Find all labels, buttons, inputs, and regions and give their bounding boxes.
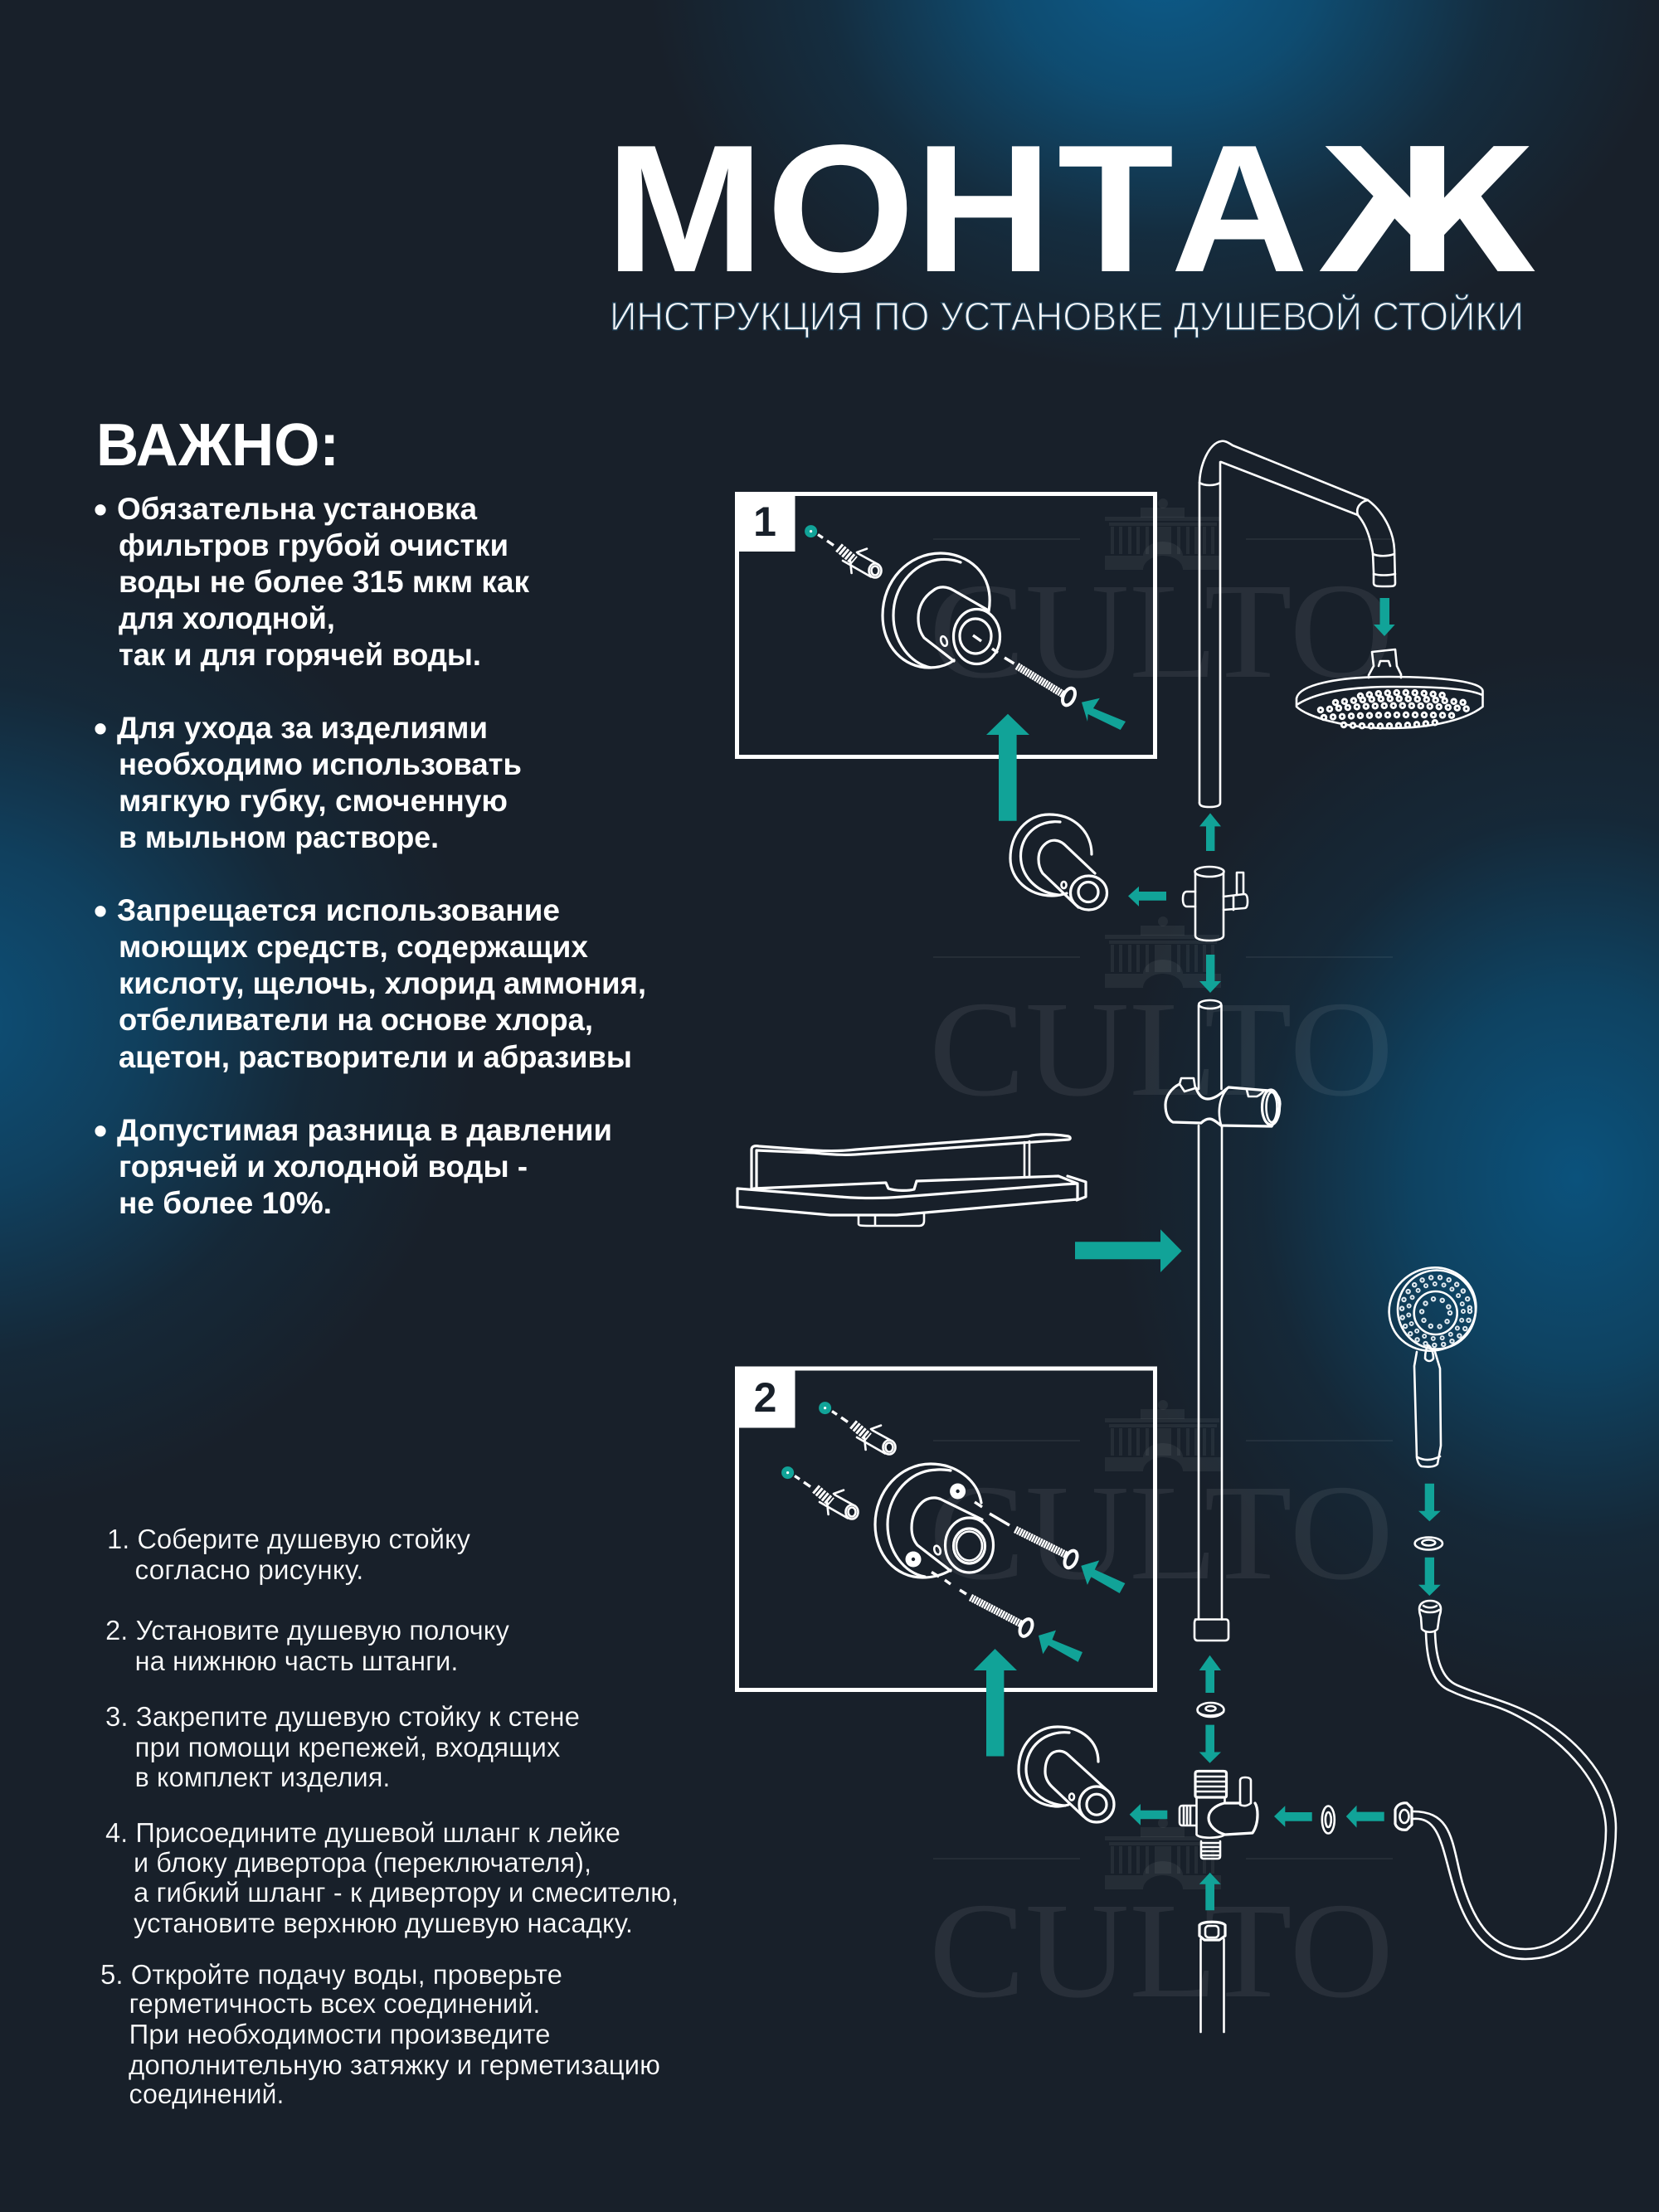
icon: wall plug (805, 525, 881, 577)
arrow: hand shower to gasket (1418, 1484, 1441, 1521)
bullet 2: необходимо использовать (119, 747, 522, 781)
bullet list: important notes (94, 488, 646, 1220)
icon: top connector with lever (1183, 867, 1248, 941)
step 4: и блоку дивертора (переключателя), (134, 1847, 591, 1878)
arrow: gasket to diverter (1199, 1725, 1221, 1763)
step 5: соединений. (129, 2078, 284, 2109)
bullet 3: моющих средств, содержащих (119, 930, 588, 964)
step 1 (107, 1524, 470, 1585)
step 2: на нижнюю часть штанги. (134, 1646, 458, 1676)
arrow: connector to rail (1199, 955, 1221, 993)
icon: small wall bracket lower (1019, 1727, 1114, 1822)
watermark: culto second: CULTO (929, 973, 1394, 1125)
step 4: установите верхнюю душевую насадку. (134, 1908, 633, 1938)
arrow: bracket to detail 2 (974, 1649, 1017, 1757)
bullet 3 (94, 889, 646, 1074)
number tile 1: 1 (753, 498, 776, 545)
icon: hand shower (1375, 1253, 1490, 1467)
step 5: дополнительную затяжку и герметизацию (129, 2049, 660, 2080)
arrow: rail base to gasket (1199, 1655, 1221, 1693)
bullet 2: мягкую губку, смоченную (119, 784, 508, 818)
arrow: up to diverter (1199, 1873, 1221, 1910)
subtitle: ИНСТРУКЦИЯ ПО УСТАНОВКЕ ДУШЕВОЙ СТОЙКИ (610, 294, 1524, 339)
icon: wall plug lower (781, 1466, 858, 1519)
panel: detail 2 (735, 1367, 1155, 1690)
bullet 3: ацетон, растворители и абразивы (119, 1040, 632, 1074)
step 3: при помощи крепежей, входящих (134, 1732, 561, 1762)
step 3: 3. Закрепите душевую стойку к стене (105, 1701, 580, 1732)
icon: diverter (1180, 1772, 1258, 1859)
title: МОНТАЖ (606, 107, 1538, 313)
arrow: hose to washer (1346, 1806, 1384, 1828)
icon: screw (1017, 666, 1078, 707)
step 5: При необходимости произведите (129, 2019, 551, 2049)
icon: rain shower head (1297, 649, 1483, 728)
icon: wall bracket large (875, 1464, 1010, 1594)
arrow: toward lower screw (1039, 1631, 1082, 1662)
number tile 2: 2 (754, 1374, 776, 1421)
bullet 1: • (94, 488, 107, 531)
icon: side washer (1322, 1806, 1335, 1833)
watermark: culto bottom (929, 1818, 1394, 2026)
arrow: toward upper screw (1081, 1560, 1125, 1593)
icon: screw lower (971, 1597, 1035, 1638)
bullet 2: • (94, 707, 107, 750)
arrow: connector to bracket (1128, 887, 1166, 907)
arrow: shelf to rail (1075, 1229, 1182, 1272)
bullet 3: кислоту, щелочь, хлорид аммония, (119, 966, 646, 1000)
bullet 1: воды не более 315 мкм как (119, 565, 529, 599)
step 5: герметичность всех соединений. (129, 1988, 541, 2019)
bullet 3: Запрещается использование (117, 893, 560, 927)
arrow: bracket to detail 1 (986, 714, 1029, 821)
watermark: culto bottom: CULTO (929, 1874, 1394, 2026)
icon: screw upper (1015, 1529, 1080, 1570)
icon: wall bracket large (883, 553, 1014, 668)
watermark: culto second (929, 916, 1394, 1125)
step 3: в комплект изделия. (134, 1762, 390, 1792)
bullet 1: так и для горячей воды. (119, 638, 481, 672)
icon: small wall bracket upper (1010, 814, 1107, 910)
icon: soap shelf (737, 1135, 1086, 1226)
bullet 4: • (94, 1109, 107, 1152)
step 5: 5. Откройте подачу воды, проверьте (100, 1959, 562, 1990)
number tile 1 (735, 492, 795, 552)
step 4: 4. Присоедините душевой шланг к лейке (105, 1817, 620, 1848)
bullet 2 (94, 707, 522, 854)
arrow: gasket to hose (1418, 1558, 1441, 1596)
watermark: culto top (929, 498, 1394, 707)
bullet 2: Для ухода за изделиями (117, 711, 488, 745)
bullet 1: Обязательна установка (117, 492, 477, 526)
bullet 4: горячей и холодной воды - (119, 1150, 528, 1184)
bullet 3: отбеливатели на основе хлора, (119, 1003, 593, 1037)
bullet 2: в мыльном растворе. (119, 820, 439, 854)
arrow: washer to diverter (1274, 1806, 1312, 1827)
number tile 2 (735, 1367, 795, 1428)
icon: slider clamp (1165, 1078, 1280, 1127)
icon: lower supply pipe (1199, 1922, 1225, 2032)
icon: wall plug upper (819, 1402, 896, 1455)
step 3 (105, 1701, 580, 1792)
numbered instructions (100, 1524, 679, 2109)
bullet 1: фильтров грубой очистки (119, 528, 508, 562)
bullet 1 (94, 488, 529, 672)
icon: rail gasket (1198, 1703, 1224, 1717)
bullet 3: • (94, 889, 107, 932)
bullet 1: для холодной, (119, 601, 335, 635)
arrow: toward screw (1082, 698, 1126, 730)
heading: important: ВАЖНО: (96, 412, 339, 479)
panel: detail 1 (735, 492, 1155, 756)
icon: flexible hose (1395, 1601, 1616, 1959)
bullet 4: не более 10%. (119, 1186, 332, 1220)
step 1: 1. Соберите душевую стойку (107, 1524, 470, 1554)
step 4 (105, 1817, 679, 1938)
icon: hose gasket (1415, 1538, 1443, 1549)
bullet 4 (94, 1109, 612, 1220)
step 4: а гибкий шланг - к дивертору и смесителю, (134, 1877, 679, 1908)
arrow: arm to rain head (1374, 598, 1395, 636)
bullet 4: Допустимая разница в давлении (117, 1113, 612, 1147)
arrow: connector up (1199, 813, 1221, 851)
arrow: diverter to bracket (1130, 1804, 1167, 1826)
watermark: culto top: CULTO (929, 555, 1394, 707)
step 1: согласно рисунку. (134, 1554, 363, 1585)
icon: upper shower pipe (1199, 441, 1395, 807)
watermark: culto third: CULTO (929, 1456, 1394, 1608)
step 2: 2. Установите душевую полочку (105, 1615, 509, 1646)
step 5 (100, 1959, 660, 2109)
watermark: culto third (929, 1400, 1394, 1608)
step 2 (105, 1615, 509, 1676)
icon: sliding rail (1194, 1000, 1228, 1641)
